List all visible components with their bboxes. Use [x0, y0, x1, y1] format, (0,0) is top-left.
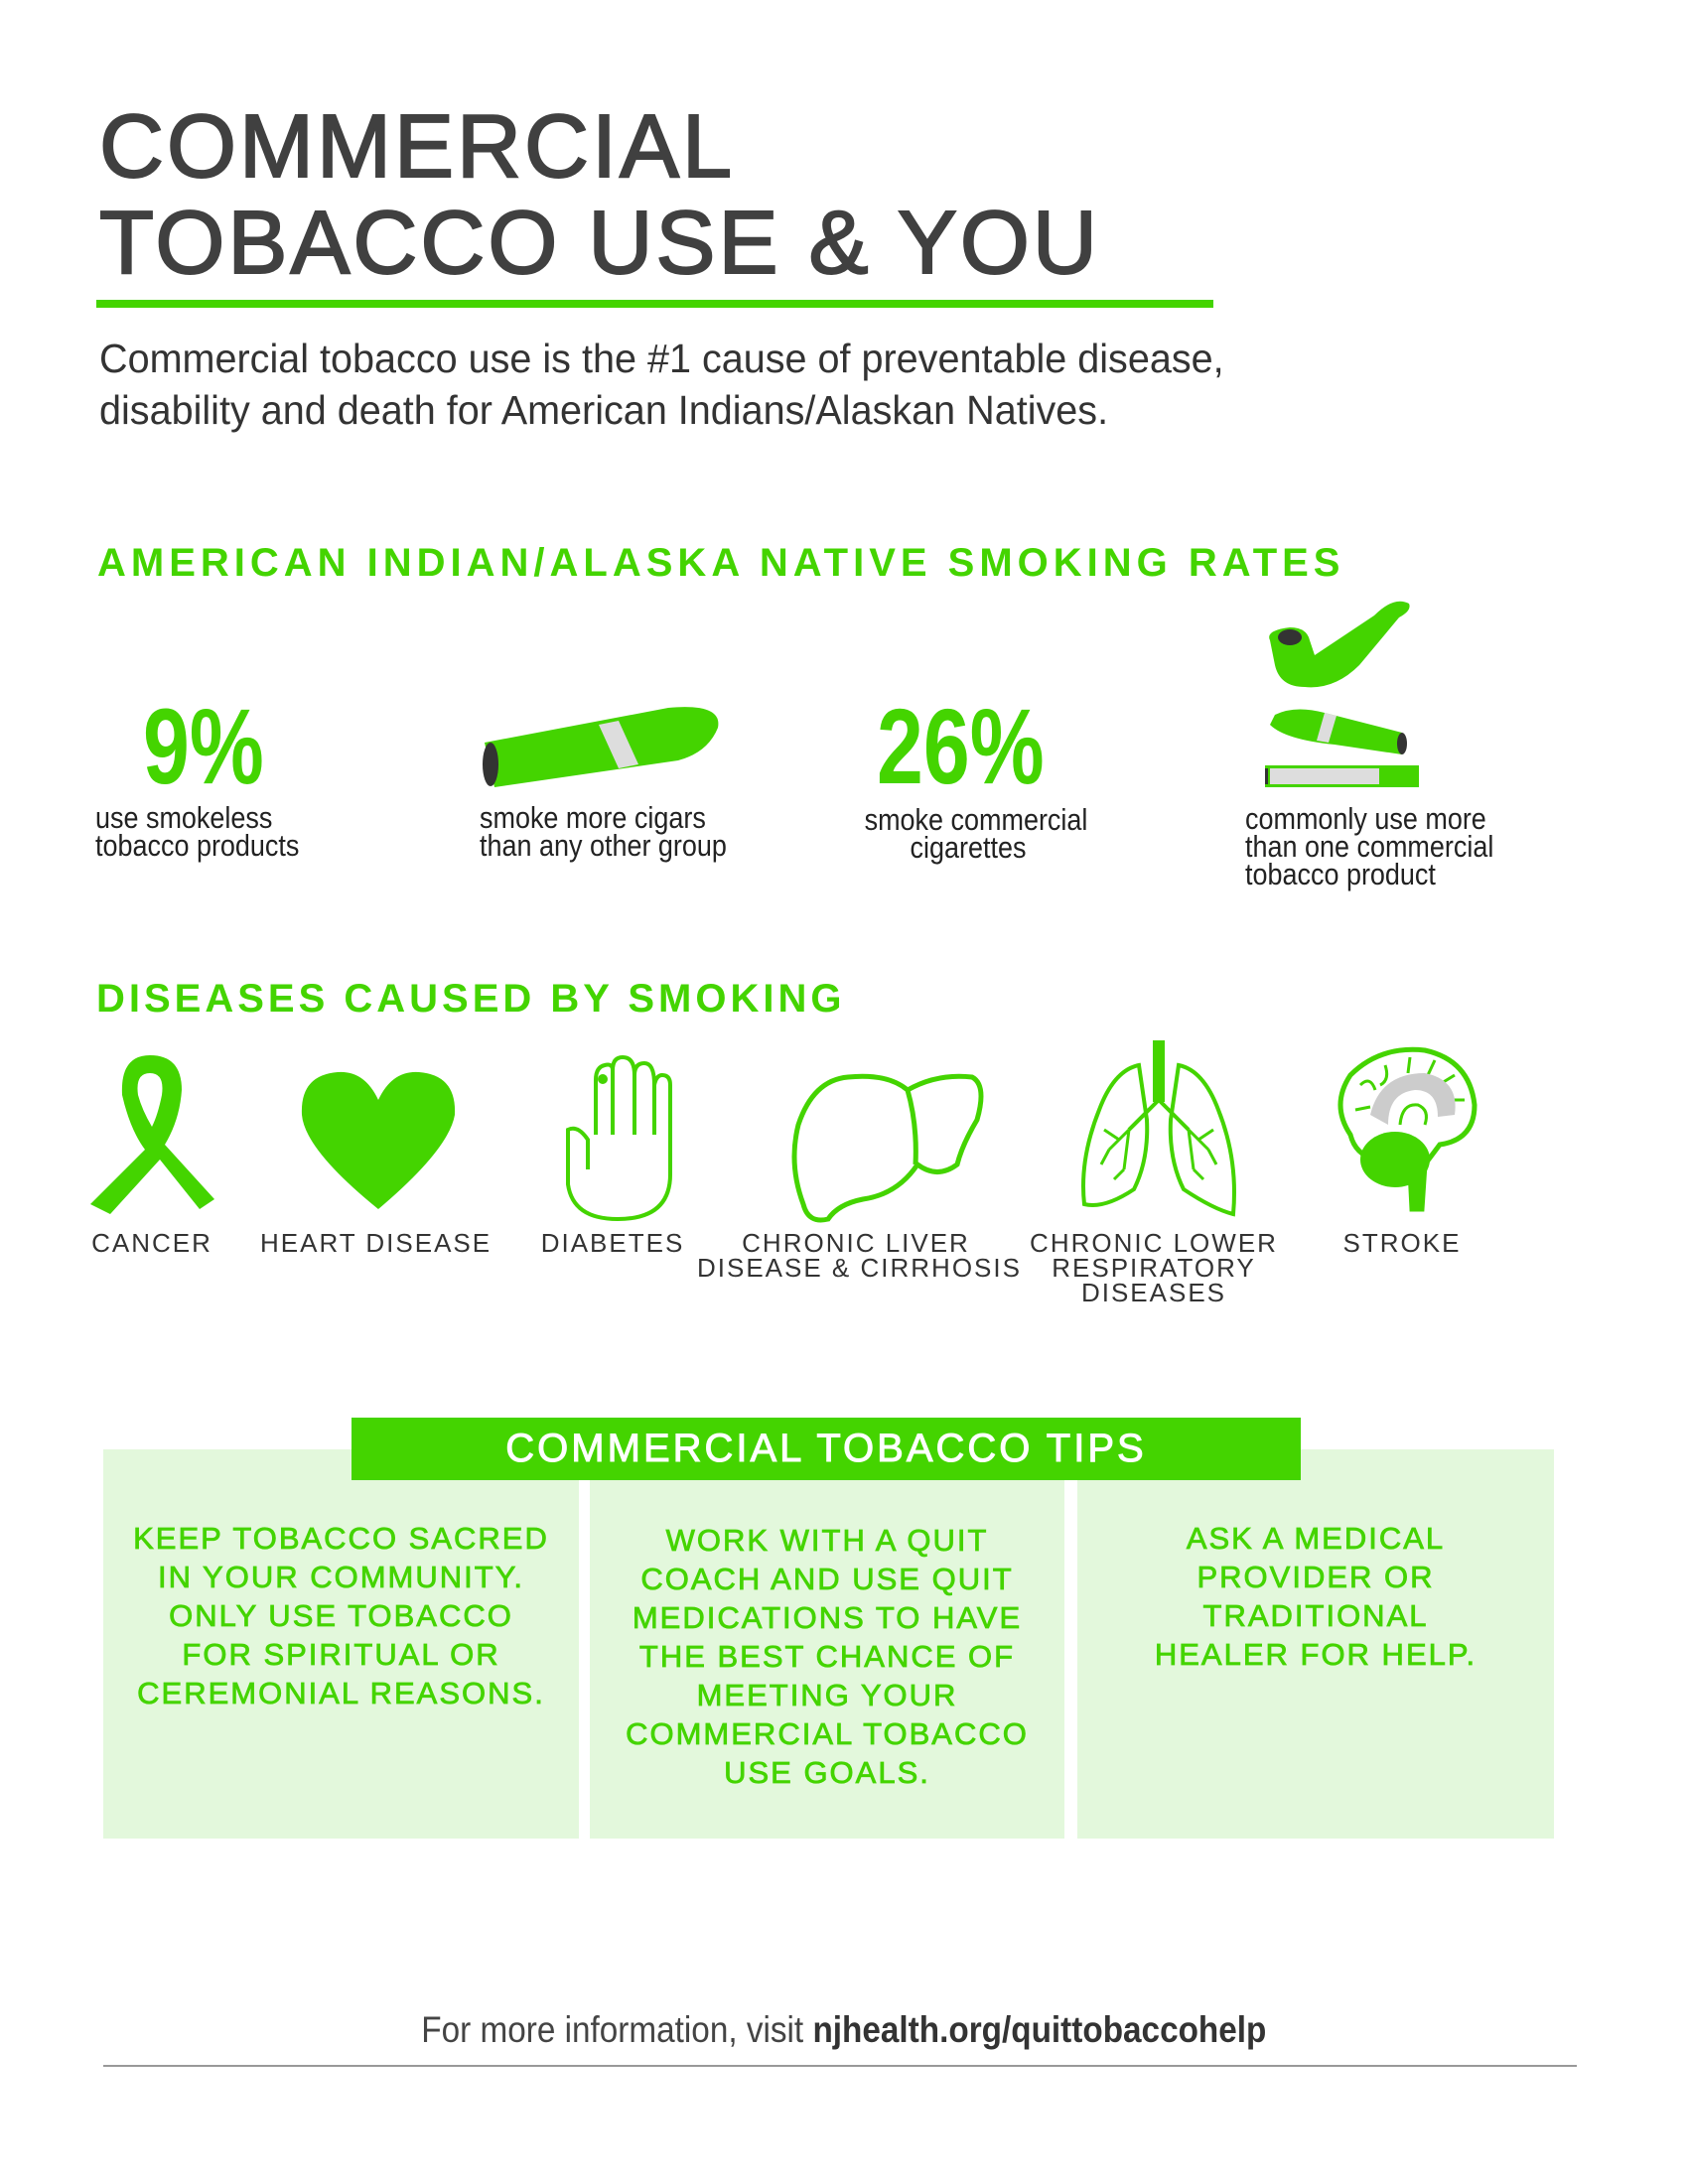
- icon: cigar: [483, 707, 719, 787]
- subtitle: Commercial tobacco use is the #1 cause of preventable disease,: [99, 336, 1224, 381]
- title underline: [96, 300, 1213, 308]
- stat: 9%: tobacco products: [95, 828, 299, 863]
- subtitle: disability and death for American Indians/Alaskan Natives.: [99, 387, 1108, 433]
- panel: tip 2: MEDICATIONS TO HAVE: [633, 1600, 1022, 1635]
- panel: tip 1: ONLY USE TOBACCO: [169, 1598, 513, 1633]
- stat: multiple products: [1245, 602, 1493, 891]
- disease: diabetes: [541, 1055, 684, 1258]
- tips header bar: COMMERCIAL TOBACCO TIPS: [505, 1427, 1147, 1470]
- disease: cancer: CANCER: [91, 1228, 212, 1258]
- disease: lungs: [1030, 1040, 1278, 1307]
- panel: tip 2: [590, 1449, 1064, 1839]
- stat: 26%: smoke commercial: [865, 802, 1087, 837]
- panel: tip 3: [1077, 1449, 1554, 1839]
- stat: 26%: [865, 686, 1087, 865]
- disease: liver: DISEASE & CIRRHOSIS: [697, 1253, 1022, 1283]
- disease: diabetes: DIABETES: [541, 1228, 684, 1258]
- heading: smoking rates: AMERICAN INDIAN/ALASKA NATIVE SMOKING RATES: [97, 541, 1344, 585]
- disease: liver: CHRONIC LIVER: [742, 1228, 970, 1258]
- panel: tip 2: MEETING YOUR: [697, 1678, 957, 1712]
- stat: 9%: use smokeless: [95, 800, 272, 835]
- stat: cigars: smoke more cigars: [480, 800, 706, 835]
- stat: multiple products: tobacco product: [1245, 857, 1436, 891]
- disease: stroke: STROKE: [1343, 1228, 1461, 1258]
- icon: pipe: [1269, 602, 1410, 687]
- panel: tip 1: KEEP TOBACCO SACRED: [133, 1521, 549, 1556]
- icon: cigarette: [1265, 765, 1419, 787]
- disease: cancer: [90, 1055, 214, 1258]
- panel: tip 1: [103, 1449, 579, 1839]
- stat: 9%: [95, 686, 299, 863]
- title: TOBACCO USE & YOU: [99, 194, 1100, 293]
- disease: lungs: CHRONIC LOWER: [1030, 1228, 1278, 1258]
- panel: tip 2: THE BEST CHANCE OF: [639, 1639, 1015, 1674]
- panel: tip 2: COMMERCIAL TOBACCO: [626, 1716, 1029, 1751]
- subtitle: [99, 336, 1224, 433]
- panel: tip 3: PROVIDER OR: [1196, 1560, 1435, 1594]
- stat: multiple products: than one commercial: [1245, 829, 1493, 864]
- stat: 26%: 26%: [877, 686, 1045, 806]
- heading: diseases: DISEASES CAUSED BY SMOKING: [96, 977, 846, 1021]
- panel: tip 2: WORK WITH A QUIT: [666, 1523, 988, 1558]
- tips header bar: [352, 1418, 1301, 1480]
- disease: lungs: RESPIRATORY: [1052, 1253, 1256, 1283]
- panel: tip 2: COACH AND USE QUIT: [640, 1562, 1014, 1596]
- stat: 26%: cigarettes: [911, 830, 1026, 865]
- title: COMMERCIAL: [99, 97, 735, 197]
- title: [99, 97, 1100, 293]
- panel: tip 3: ASK A MEDICAL: [1187, 1521, 1445, 1556]
- stat: cigars: [480, 707, 727, 863]
- panel: tip 2: USE GOALS.: [724, 1755, 930, 1790]
- icon: small cigar: [1270, 709, 1407, 754]
- disease: heart: HEART DISEASE: [260, 1228, 492, 1258]
- disease: lungs: DISEASES: [1081, 1278, 1226, 1307]
- panel: tip 1: FOR SPIRITUAL OR: [182, 1637, 500, 1672]
- disease: liver: [697, 1074, 1022, 1283]
- disease: heart: [260, 1072, 492, 1258]
- stat: 9%: 9%: [143, 686, 264, 806]
- panel: tip 3: HEALER FOR HELP.: [1155, 1637, 1477, 1672]
- panel: tip 3: TRADITIONAL: [1203, 1598, 1428, 1633]
- panel: tip 1: IN YOUR COMMUNITY.: [158, 1560, 524, 1594]
- panel: tip 1: CEREMONIAL REASONS.: [137, 1676, 545, 1710]
- stat: cigars: than any other group: [480, 828, 727, 863]
- disease: stroke: [1337, 1046, 1477, 1258]
- footer text: For more information, visit njhealth.org/quittobaccohelp: [421, 2009, 1267, 2050]
- stat: multiple products: commonly use more: [1245, 801, 1486, 836]
